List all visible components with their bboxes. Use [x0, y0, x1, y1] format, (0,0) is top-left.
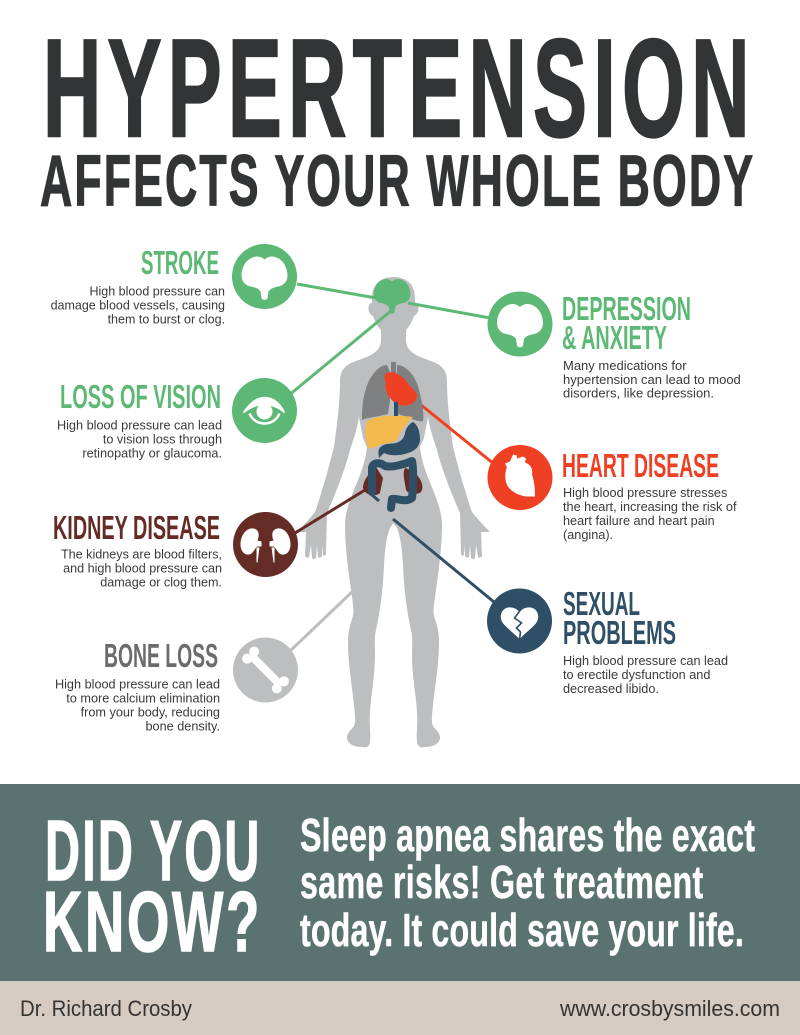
- kidneys: [363, 467, 422, 495]
- text: depression and anxiety: disorders, like depression.: [563, 386, 714, 400]
- text: heart disease: High blood pressure stresses: [563, 486, 727, 500]
- text: bone loss: High blood pressure can lead: [55, 678, 220, 692]
- text: depression and anxiety: hypertension can lead to mood: [563, 372, 741, 387]
- lungs: [362, 362, 423, 421]
- text: sexual problems: to erectile dysfunction and: [563, 668, 710, 682]
- heading: bone loss: BONE LOSS: [104, 637, 218, 674]
- text: kidney disease: damage or clog them.: [100, 576, 222, 590]
- heading: sexual problems: PROBLEMS: [563, 614, 676, 651]
- text: sexual problems: decreased libido.: [563, 682, 659, 696]
- text: sexual problems: [563, 654, 728, 696]
- text: sleep apnea message: Sleep apnea shares the exact: [300, 810, 755, 861]
- text: heart disease: the heart, increasing the risk of: [563, 500, 737, 514]
- brain in head: [374, 279, 410, 314]
- icon: bone: [233, 638, 298, 702]
- title: HYPERTENSION: [43, 11, 749, 167]
- heading: depression and anxiety: [562, 290, 691, 356]
- organs: [362, 362, 423, 508]
- text: bone loss: from your body, reducing: [81, 706, 220, 720]
- text: kidney disease: and high blood pressure can: [63, 562, 222, 576]
- text: bone loss: bone density.: [145, 720, 220, 734]
- text: stroke: damage blood vessels, causing: [51, 298, 225, 312]
- text: heart disease: [563, 486, 737, 542]
- text: bone loss: [55, 678, 220, 734]
- text: heart disease: (angina).: [563, 528, 613, 542]
- text: stroke: [51, 284, 225, 326]
- text: loss of vision: to vision loss through: [103, 432, 222, 446]
- text: stroke: High blood pressure can: [90, 284, 225, 298]
- panel: sexual problems: [487, 585, 728, 696]
- panel: depression and anxiety: [488, 290, 741, 400]
- panel: kidney disease: [53, 509, 298, 590]
- text: loss of vision: retinopathy or glaucoma.: [82, 446, 222, 460]
- heading: stroke: STROKE: [141, 244, 219, 281]
- heart: [384, 372, 417, 406]
- heading: kidney disease: KIDNEY DISEASE: [53, 509, 220, 546]
- icon: brain: [232, 244, 297, 309]
- heading: depression and anxiety: & ANXIETY: [562, 319, 667, 356]
- heading: did you know: KNOW?: [43, 875, 259, 970]
- icon: kidneys: [233, 512, 298, 577]
- body silhouette: [297, 277, 490, 747]
- panel: stroke: [51, 244, 297, 326]
- text: kidney disease: The kidneys are blood filters,: [61, 548, 222, 562]
- heading: depression and anxiety: DEPRESSION: [562, 290, 691, 327]
- text: depression and anxiety: Many medications for: [563, 358, 687, 373]
- text: stroke: them to burst or clog.: [108, 312, 225, 326]
- icon: heart: [488, 445, 552, 510]
- heading: did you know: [43, 803, 259, 970]
- text: kidney disease: [61, 548, 222, 590]
- icon: broken heart: [487, 588, 552, 654]
- text: bone loss: to more calcium elimination: [66, 692, 220, 706]
- text: heart disease: heart failure and heart pain: [563, 514, 715, 528]
- heading: did you know: DID YOU: [45, 803, 259, 898]
- heading: sexual problems: [563, 585, 676, 651]
- text: loss of vision: High blood pressure can lead: [57, 418, 222, 432]
- panel: loss of vision: [57, 378, 297, 460]
- heading: loss of vision: LOSS OF VISION: [60, 378, 221, 415]
- panel: did you know banner: [0, 784, 800, 981]
- website: www.crosbysmiles.com: [559, 996, 780, 1021]
- icon: eye: [232, 378, 297, 443]
- panel: heart disease: [488, 445, 737, 542]
- text: sleep apnea message: [300, 810, 755, 956]
- text: sleep apnea message: same risks! Get treatment: [300, 857, 703, 908]
- text: sleep apnea message: today. It could save your life.: [300, 905, 744, 956]
- title: AFFECTS YOUR WHOLE BODY: [40, 141, 753, 221]
- heading: sexual problems: SEXUAL: [563, 585, 640, 622]
- stomach: [378, 422, 420, 458]
- text: sexual problems: High blood pressure can lead: [563, 654, 728, 668]
- esophagus: [394, 402, 398, 416]
- text: depression and anxiety: [563, 358, 741, 400]
- icon: brain: [488, 292, 552, 356]
- panel: bone loss: [55, 637, 298, 734]
- doctor name: Dr. Richard Crosby: [20, 996, 192, 1021]
- text: loss of vision: [57, 418, 222, 460]
- panel: footer: [0, 981, 800, 1035]
- connector lines: [288, 284, 494, 652]
- liver: [365, 416, 413, 448]
- intestine: [372, 461, 413, 508]
